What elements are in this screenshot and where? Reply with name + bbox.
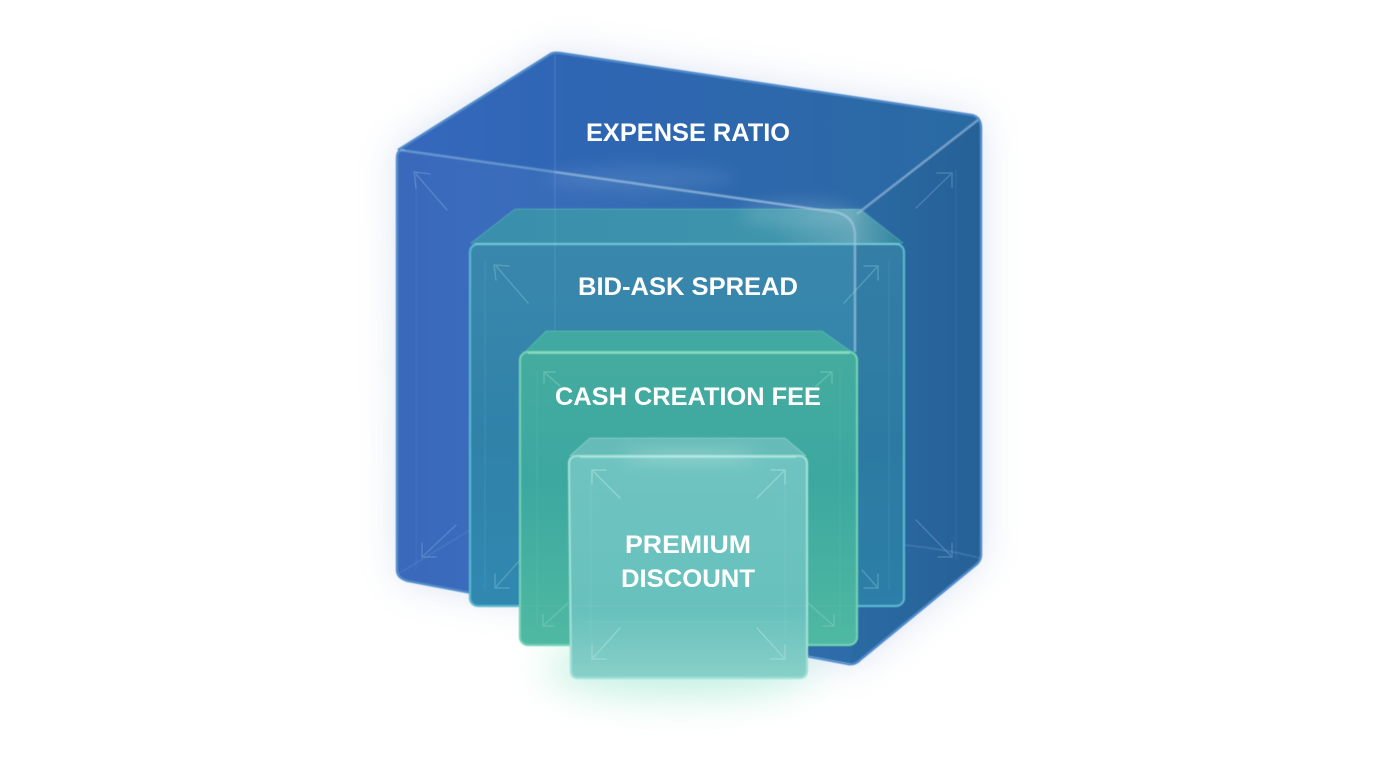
label: premium discount [621,531,755,593]
bid-ask glass strip behind outer cube edge [856,245,903,605]
label: expense ratio: EXPENSE RATIO [586,119,790,147]
label: cash creation fee: CASH CREATION FEE [555,383,821,411]
icon: expansion arrows on outer cube [414,172,952,557]
outer cube front edges seen through glass [555,120,978,352]
panel: premium discount cube [569,438,807,678]
panel: cash creation fee cube [520,331,857,645]
cube top face [398,53,978,215]
highlight: premium top sheen [620,449,760,463]
glow: soft shadow around the cube stack [397,53,980,696]
premium top face [569,438,807,456]
cube front face [397,150,853,664]
premium edges [569,438,807,678]
highlight: glass sheen [545,166,860,229]
panel: expense ratio outer cube [397,53,981,664]
panel: bid-ask spread cube [470,120,978,606]
label: bid-ask spread: BID-ASK SPREAD [578,273,798,301]
cube right face [850,120,981,664]
label: premium discount: DISCOUNT [621,565,755,593]
cash front face [520,352,857,645]
label: premium discount: PREMIUM [625,531,751,559]
premium front face [569,456,807,678]
icon: expansion arrows on bid-ask cube [494,265,878,588]
bid-ask edges [470,209,904,606]
icon: expansion arrows on premium cube [592,470,785,659]
cash top face [520,331,857,352]
cube edges [397,53,981,664]
bid-ask front face [470,244,904,606]
cash edges [520,331,857,645]
bid-ask top face [470,209,904,244]
icon: expansion arrows on cash cube [543,372,834,626]
